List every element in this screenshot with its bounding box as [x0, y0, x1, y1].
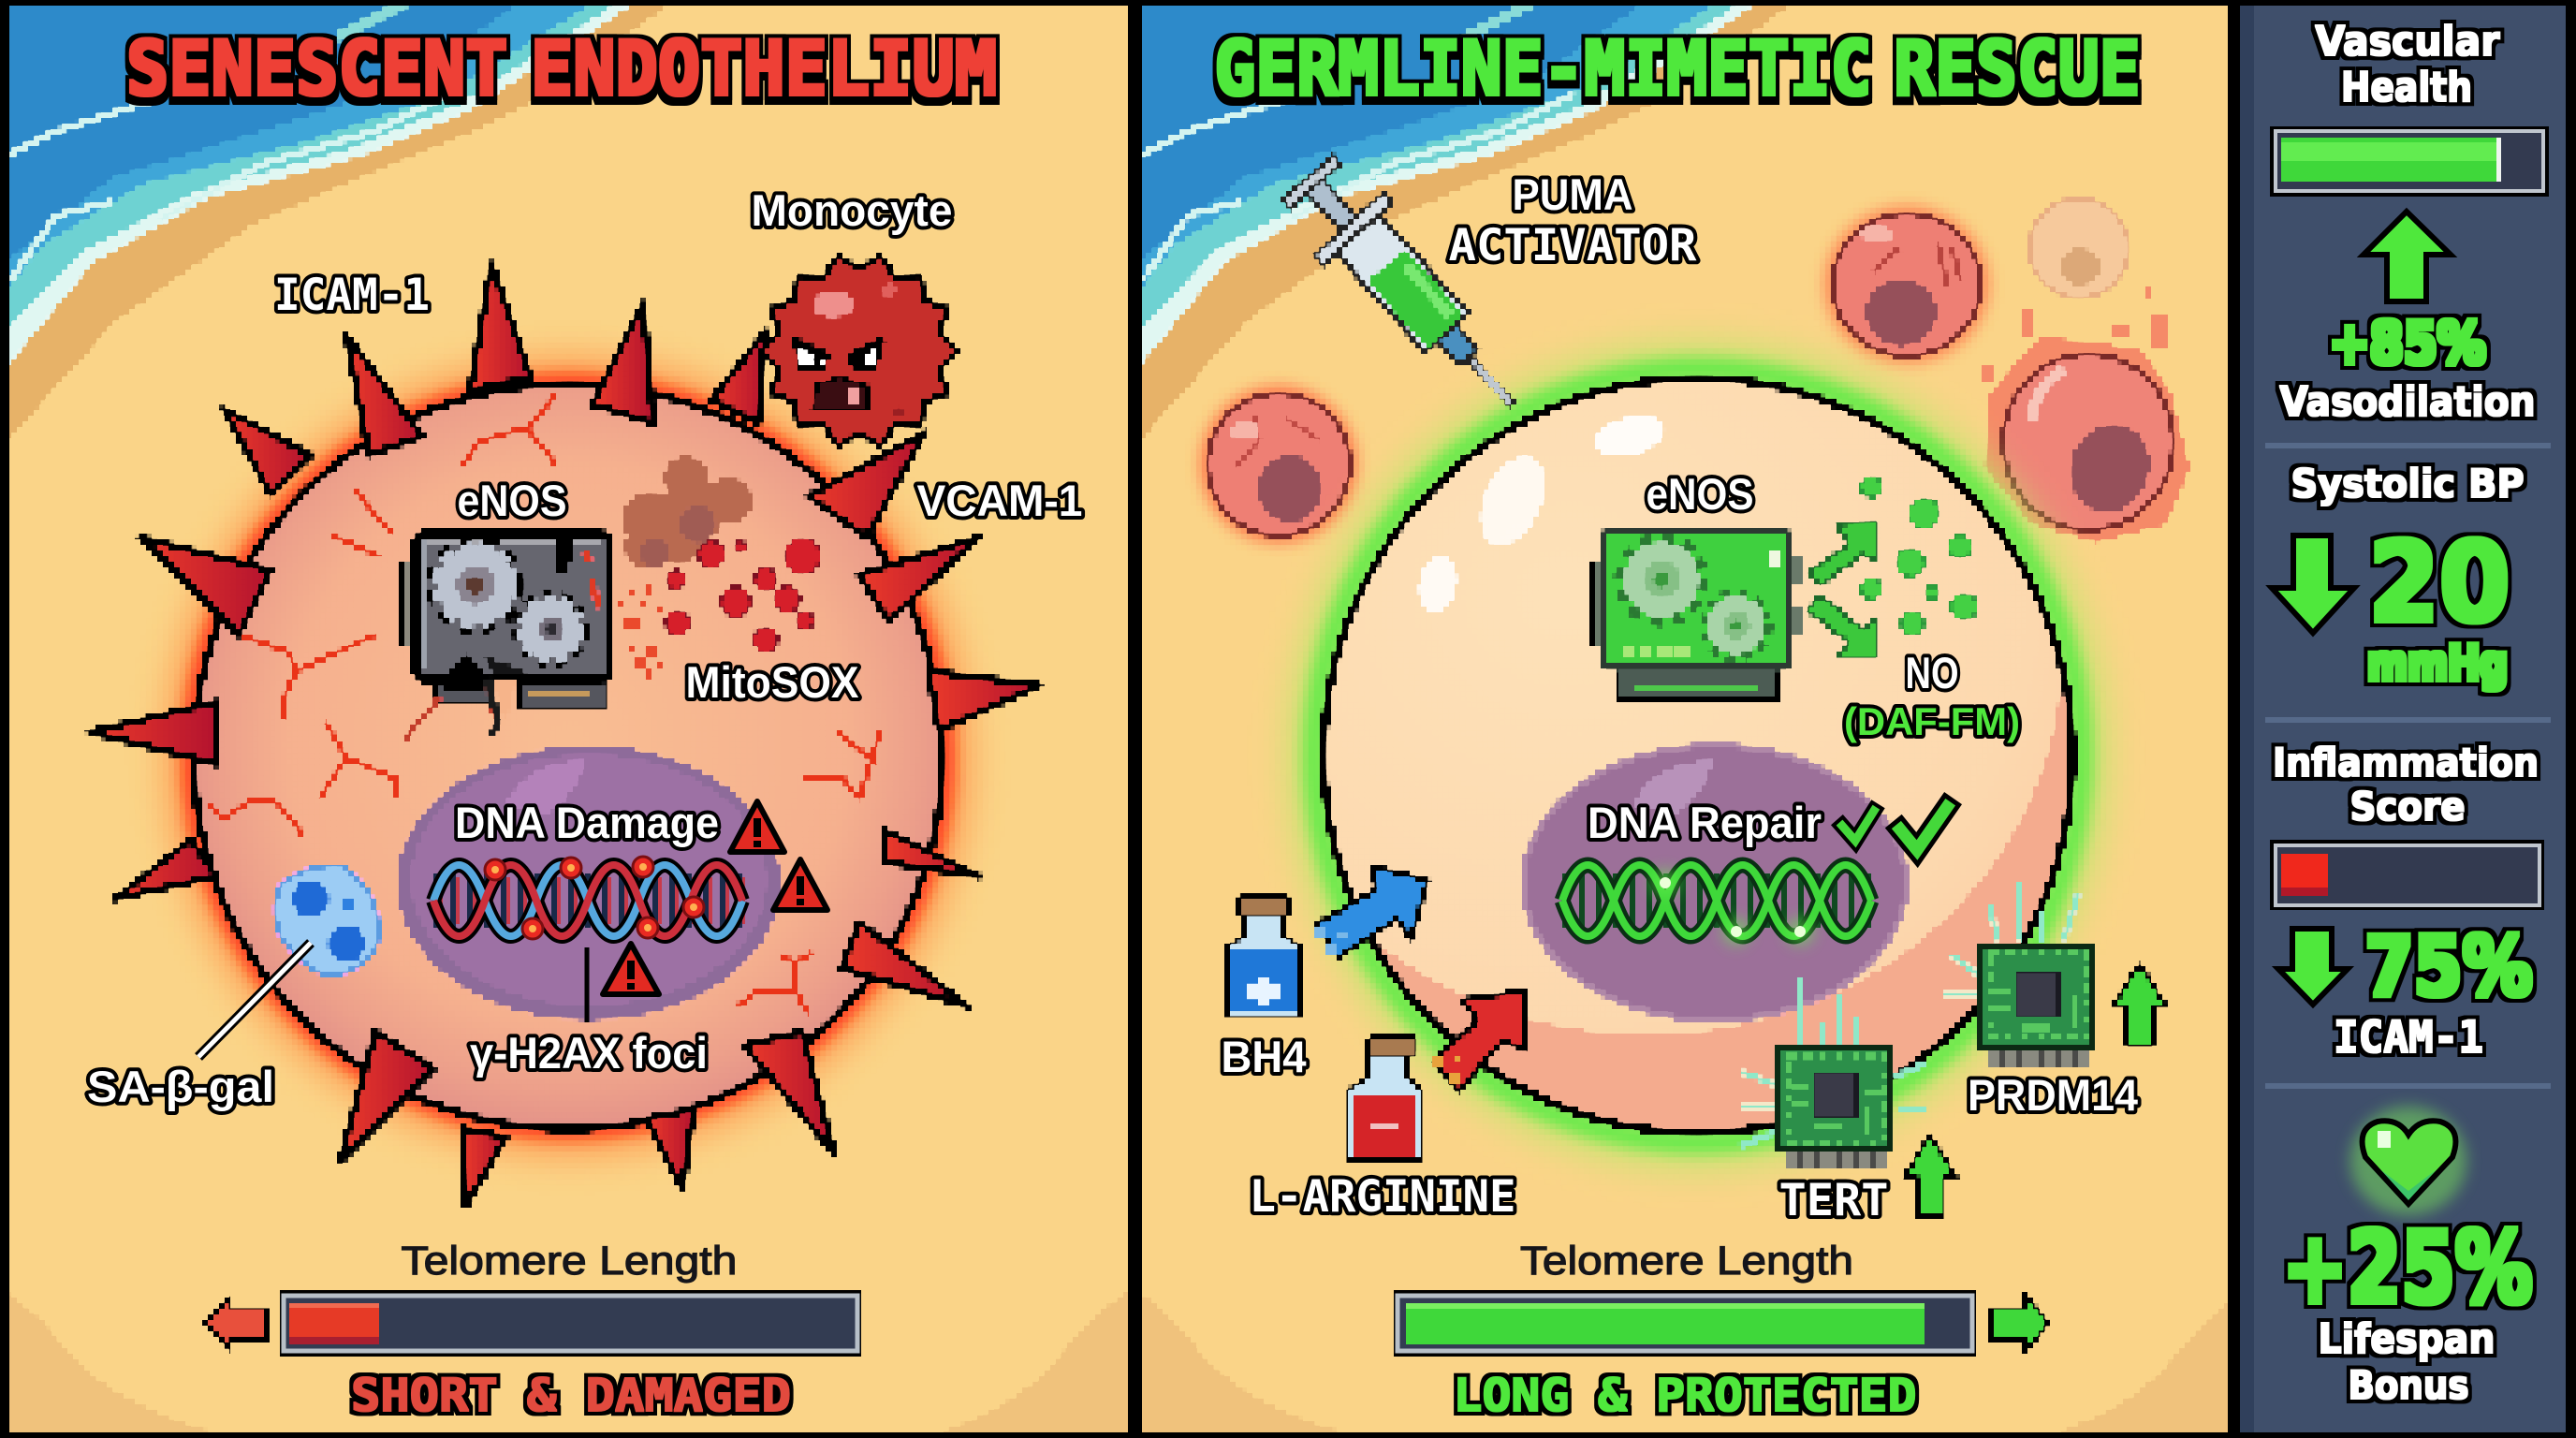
label: lifespan bonus: Bonus	[2348, 1362, 2469, 1408]
check marks	[1842, 807, 1947, 850]
repaired DNA helix	[1562, 865, 1873, 945]
telomere label: Telomere Length	[401, 1239, 738, 1284]
label: eNOS: eNOS	[457, 476, 567, 525]
beach background	[0, 0, 1161, 1438]
panel: senescent endothelium	[0, 0, 1161, 1438]
label: VCAM-1: VCAM-1	[917, 476, 1082, 525]
value: 20: 20	[2368, 518, 2510, 647]
stat: inflammation score heading	[2273, 740, 2539, 829]
blue arrow	[1312, 867, 1427, 957]
label: DAF-FM: (DAF-FM)	[1844, 699, 2020, 743]
label: gamma-H2AX foci: γ-H2AX foci	[470, 1028, 708, 1078]
monocyte	[762, 257, 957, 446]
nucleus	[397, 745, 781, 1020]
working eNOS machine	[1591, 531, 1804, 698]
red arrow	[1432, 990, 1527, 1091]
label: ICAM-1: ICAM-1	[2334, 1012, 2483, 1064]
telomere status: short and damaged: SHORT & DAMAGED	[351, 1370, 791, 1422]
vial L-arginine	[1347, 1037, 1422, 1159]
label: BH4: BH4	[1221, 1032, 1307, 1081]
icon: green heart	[2350, 1107, 2466, 1215]
telomere status: long and protected: LONG & PROTECTED	[1453, 1370, 1917, 1422]
vial BH4	[1227, 897, 1301, 1017]
telomere label: Telomere Length	[1520, 1239, 1853, 1284]
telomere arrow left	[206, 1297, 266, 1350]
panel: stats sidebar	[2240, 6, 2566, 1432]
title: germline-mimetic rescue: GERMLINE-MIMETIC RESCUE	[1215, 25, 2140, 112]
label: NO: NO	[1906, 648, 1958, 697]
value: 75%: 75%	[2364, 918, 2533, 1015]
leader lines	[198, 943, 587, 1057]
divider	[2265, 1083, 2551, 1089]
value: +85%: +85%	[2329, 309, 2486, 377]
arrow up TERT	[1904, 1135, 1956, 1217]
senescent cell	[186, 378, 950, 1135]
label: DNA Damage: DNA Damage	[455, 798, 719, 847]
syringe	[1273, 147, 1546, 435]
telomere bar short	[280, 1290, 861, 1357]
label: systolic BP: Systolic BP	[2291, 461, 2524, 506]
NO output arrows and particles	[1808, 477, 1977, 657]
arrow down	[2278, 929, 2348, 1005]
damaged DNA helix	[433, 857, 745, 939]
sick cell left	[1200, 386, 1357, 543]
dissolving cell	[1980, 286, 2190, 543]
label: L-ARGININE: L-ARGININE	[1249, 1171, 1516, 1223]
beach background	[1133, 0, 2275, 1438]
label: DNA Repair: DNA Repair	[1588, 798, 1822, 847]
label: vasodilation: Vasodilation	[2280, 378, 2535, 426]
label: Monocyte: Monocyte	[751, 185, 953, 235]
chip TERT	[1739, 978, 1926, 1168]
broken eNOS machine	[402, 534, 610, 740]
sick cell top	[1824, 206, 1989, 363]
label: PUMA ACTIVATOR: PUMA	[1513, 169, 1632, 219]
label: PRDM14: PRDM14	[1968, 1070, 2138, 1120]
label: PUMA ACTIVATOR	[1449, 169, 1697, 271]
panel artwork	[0, 0, 1161, 1438]
label: PUMA ACTIVATOR: ACTIVATOR	[1449, 220, 1697, 271]
telomere bar long	[1394, 1290, 1976, 1357]
arrow down	[2272, 536, 2354, 633]
fading ghost cell	[2029, 198, 2129, 298]
ROS smoke and MitoSOX particles	[618, 456, 820, 678]
label: eNOS: eNOS	[1646, 469, 1754, 519]
stat: inflammation score heading: Inflammation	[2273, 740, 2539, 785]
spikes: adhesion molecules	[90, 264, 1040, 1206]
label: SA-beta-gal: SA-β-gal	[87, 1062, 274, 1111]
chip PRDM14	[1942, 880, 2094, 1065]
arrow up	[2364, 212, 2451, 301]
SA-beta-gal vacuole	[275, 866, 379, 976]
arrow up PRDM14	[2113, 963, 2166, 1046]
divider	[2265, 443, 2551, 448]
inflammation bar	[2270, 840, 2544, 910]
vascular health bar	[2270, 126, 2549, 197]
panel: germline-mimetic rescue	[1133, 0, 2275, 1438]
stat: vascular health heading: Vascular	[2316, 18, 2500, 66]
healthy cell	[1234, 276, 2082, 1142]
label: lifespan bonus: Lifespan	[2318, 1315, 2496, 1363]
sidebar background	[2240, 6, 2566, 1432]
title: senescent endothelium: SENESCENT ENDOTHELIUM	[126, 25, 997, 112]
nucleus	[1523, 745, 1907, 1020]
label: MitoSOX: MitoSOX	[685, 657, 859, 707]
telomere arrow right	[1991, 1297, 2049, 1350]
label: ICAM-1: ICAM-1	[274, 270, 430, 321]
label: lifespan bonus	[2318, 1315, 2496, 1408]
stat: inflammation score heading: Score	[2349, 784, 2466, 829]
unit: mmHg: mmHg	[2367, 636, 2508, 692]
label: TERT: TERT	[1778, 1175, 1889, 1226]
divider	[2265, 717, 2551, 723]
warning icons	[603, 801, 827, 994]
stat: vascular health heading: Health	[2341, 64, 2472, 111]
rescue panel artwork	[1133, 0, 2275, 1438]
sidebar stripe	[2240, 6, 2254, 1432]
stat: vascular health heading	[2316, 18, 2500, 111]
